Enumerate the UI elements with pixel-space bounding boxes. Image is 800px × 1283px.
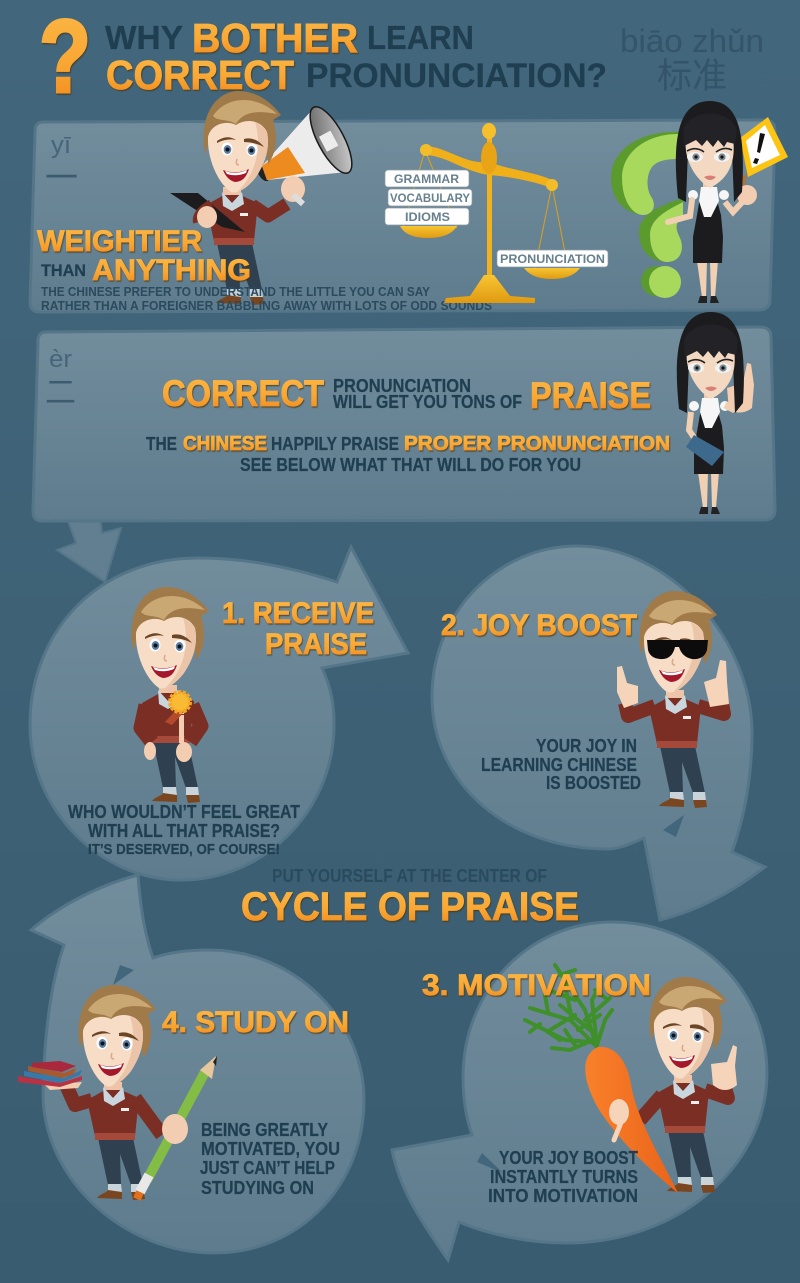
text block: center of cycle: PUT YOURSELF AT THE CENTER OF: [272, 866, 547, 886]
heading: 1 receive praise: [222, 597, 374, 661]
text block: explanation: RATHER THAN A FOREIGNER BABBLING AWAY WITH LOTS OF ODD SOUNDS: [41, 298, 492, 313]
icon: green question mark: [611, 132, 683, 298]
text block: step 1: WITH ALL THAT PRAISE?: [88, 821, 280, 841]
character: woman with sign: [668, 101, 788, 303]
character: man with books and pencil: [18, 985, 217, 1200]
text block: chinese praise: [146, 433, 670, 475]
text block: step 2: YOUR JOY IN: [536, 736, 637, 756]
icon: golden scale: [400, 123, 580, 303]
text block: step 3: INTO MOTIVATION: [488, 1186, 638, 1206]
text block: chinese praise: SEE BELOW WHAT THAT WILL DO FOR YOU: [240, 455, 581, 475]
word: biao zhun: 标准: [657, 57, 727, 96]
text block: step 1: [68, 802, 300, 858]
word: biao zhun: [620, 23, 764, 96]
label: yi: yī: [51, 132, 71, 159]
label: er: [45, 346, 76, 410]
heading: correct pronunciation praise: CORRECT: [162, 373, 324, 414]
title: [39, 0, 607, 115]
text block: chinese praise: THE: [146, 434, 177, 454]
arrow: panel to cycle: [57, 515, 121, 582]
heading: weightier: WEIGHTIER: [37, 225, 202, 258]
heading: correct pronunciation praise: [162, 373, 651, 416]
heading: 1 receive praise: PRAISE: [265, 628, 367, 661]
arrow notch: step 4: [113, 965, 134, 985]
label: pronunciation: PRONUNCIATION: [500, 252, 605, 266]
heading: 3 motivation: 3. MOTIVATION: [422, 969, 651, 1002]
heading: than anything: THAN: [41, 261, 86, 280]
text block: step 3: YOUR JOY BOOST: [499, 1148, 638, 1168]
text block: step 1: WHO WOULDN’T FEEL GREAT: [68, 802, 300, 822]
character: man with medal: [131, 587, 209, 803]
heading: cycle of praise: CYCLE OF PRAISE: [241, 885, 579, 929]
heading: 2 joy boost: 2. JOY BOOST: [441, 609, 637, 642]
title line one: BOTHER: [192, 15, 358, 61]
icon: warning sign: [738, 117, 788, 210]
icon: big question mark: ?: [39, 0, 91, 115]
character: man with sunglasses: [617, 591, 729, 808]
text block: step 4: BEING GREATLY: [201, 1120, 328, 1140]
label: yi: [45, 132, 78, 196]
arrow notch: step 3: [477, 1153, 503, 1173]
text block: step 1: IT’S DESERVED, OF COURSE!: [88, 841, 280, 858]
text block: step 4: MOTIVATED, YOU: [201, 1139, 340, 1159]
icon: carrot leaves: [525, 965, 612, 1050]
panel: step 1 receive praise: [30, 547, 408, 880]
heading: correct pronunciation praise: PRONUNCIATION: [333, 376, 471, 396]
text block: step 2: LEARNING CHINESE: [481, 755, 637, 775]
heading: correct pronunciation praise: PRAISE: [530, 375, 651, 416]
icon: tablet: [170, 193, 245, 232]
heading: correct pronunciation praise: WILL GET YOU TONS OF: [333, 392, 522, 412]
word: biao zhun: biāo zhǔn: [620, 23, 764, 59]
character: man with megaphone: [170, 91, 360, 305]
text block: explanation: [41, 284, 492, 313]
title line one: WHY: [105, 19, 183, 56]
icon: pencil: [137, 1056, 217, 1199]
panel: step 2 joy boost: [432, 546, 765, 920]
title line one: [105, 15, 474, 61]
label: grammar: GRAMMAR: [394, 172, 459, 186]
text block: step 2: IS BOOSTED: [546, 773, 641, 793]
label: er: 二: [45, 375, 76, 410]
icon: megaphone: [254, 101, 360, 183]
label: vocabulary: VOCABULARY: [390, 191, 470, 205]
title line one: LEARN: [367, 19, 474, 56]
label: idioms: [385, 208, 469, 225]
icon: blue folder: [686, 435, 724, 466]
text block: step 2: [481, 736, 641, 793]
label: er: èr: [49, 346, 72, 373]
panel: praise: [33, 327, 775, 521]
text block: chinese praise: HAPPILY PRAISE: [271, 434, 399, 454]
icon: sunglasses: [647, 640, 708, 659]
text block: explanation: THE CHINESE PREFER TO UNDERSTAND THE LITTLE YOU CAN SAY: [41, 284, 430, 299]
heading: 4 study on: 4. STUDY ON: [162, 1006, 349, 1039]
text block: chinese praise: CHINESE: [183, 433, 267, 455]
arrow notch: step 2: [663, 815, 684, 837]
label: grammar: [385, 170, 469, 187]
icon: medal rosette: [165, 692, 190, 725]
character: woman thumbs up: [677, 312, 754, 514]
panel: step 3 motivation: [392, 922, 767, 1260]
character: man with carrot: [525, 965, 737, 1193]
icon: carrot: [585, 1047, 678, 1193]
label: yi: 一: [45, 159, 78, 196]
icon: books: [18, 1061, 82, 1090]
text block: step 3: INSTANTLY TURNS: [490, 1167, 638, 1187]
heading: 1 receive praise: 1. RECEIVE: [222, 597, 374, 630]
heading: than anything: ANYTHING: [92, 254, 251, 287]
title line two: CORRECT: [106, 52, 294, 98]
text block: step 3: [488, 1148, 638, 1206]
label: idioms: IDIOMS: [405, 210, 450, 224]
text block: chinese praise: PROPER PRONUNCIATION: [404, 433, 670, 455]
title line two: PRONUNCIATION?: [306, 57, 607, 95]
title line two: [106, 52, 607, 98]
text block: step 4: STUDYING ON: [201, 1178, 314, 1198]
text block: step 4: JUST CAN’T HELP: [200, 1158, 335, 1178]
text block: step 4: [200, 1120, 340, 1198]
panel: weightier: [30, 120, 775, 312]
panel: step 4 study on: [31, 875, 364, 1253]
